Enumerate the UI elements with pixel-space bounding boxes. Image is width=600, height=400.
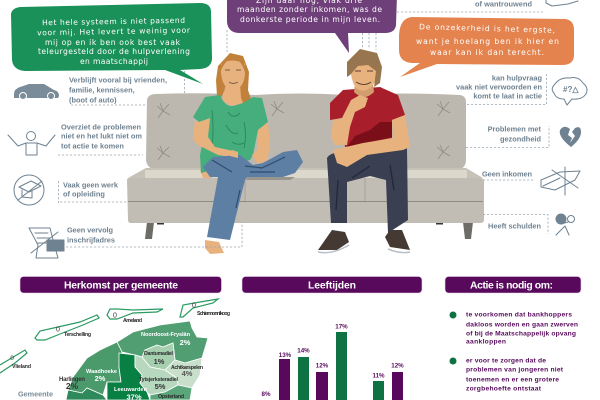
- bar chart: [262, 324, 404, 400]
- callout: schulden: [483, 214, 574, 235]
- callout: verblijf: (boot of auto): [69, 96, 117, 104]
- map labels: Schiermonnikoog: [197, 311, 230, 317]
- map labels: [10, 302, 230, 400]
- bullet 2: zorgbehoefte ontstaat: [466, 386, 542, 392]
- map labels: 2%: [180, 338, 191, 347]
- bar chart: 13%: [279, 352, 292, 359]
- map labels: 0: [113, 312, 117, 320]
- speech bubble: green: mij op en ik ben ook best vaak: [45, 38, 181, 47]
- icon: crossed graduation cap: [14, 175, 44, 205]
- map labels: 4%: [182, 369, 193, 378]
- speech bubble: orange: want je hoelang ben ik hier en: [416, 37, 559, 46]
- heading: [242, 276, 422, 293]
- man: [318, 49, 410, 253]
- speech bubble: green: voor mij. Het levert te weinig voor: [37, 26, 191, 37]
- callout: geen inschrijfadres: inschrijfadres: [67, 236, 115, 244]
- map labels: Waadhoeke: [86, 369, 117, 375]
- panel: actie is nodig: [445, 276, 581, 392]
- map labels: Noordoost-Fryslân: [141, 332, 191, 338]
- speech bubble: purple: donkerste periode in mijn leven.: [240, 15, 380, 24]
- speech bubble: orange: De onzekerheid is het ergste,: [419, 22, 555, 35]
- map labels: Dantumadiel: [144, 351, 174, 357]
- bullet 2: [450, 358, 564, 392]
- jeans: [327, 148, 408, 233]
- callout: geen werk: [14, 175, 128, 205]
- map labels: Terschelling: [64, 332, 91, 338]
- callout: gezondheid: gezondheid: [500, 134, 541, 144]
- speech bubble: orange: waar kan ik dan terecht.: [430, 48, 544, 57]
- callout: geen inkomen: Geen inkomen: [482, 170, 532, 178]
- icon: document with envelope: [29, 228, 64, 258]
- icon: sketch top right: [546, 0, 578, 6]
- speech bubble: green: Het hele systeem is niet passend: [42, 16, 185, 27]
- callout: geen inschrijfadres: [29, 222, 242, 258]
- heading: Actie is nodig om:: [470, 280, 553, 292]
- hair: [347, 49, 382, 87]
- face: [221, 60, 245, 90]
- neck: [222, 84, 243, 106]
- jeans: [203, 150, 303, 240]
- map labels: Ameland: [123, 318, 142, 324]
- bullet 2: problemen van jongeren niet: [466, 366, 564, 374]
- heading: [20, 276, 222, 293]
- bullet 1: of bij de Maatschappelijk opvang: [466, 330, 576, 338]
- callout: wantrouwend: [397, 0, 578, 12]
- callout: schulden: Heeft schulden: [488, 222, 541, 230]
- bar chart: 8%: [262, 391, 271, 398]
- icon: ball and chain figure: [556, 214, 574, 235]
- speech bubble: green: en maatschappij: [80, 57, 148, 66]
- callout: gezondheid: Problemen met: [488, 124, 542, 134]
- bar chart: 14%: [297, 348, 310, 354]
- panel: leeftijden: [242, 276, 422, 400]
- bar chart: 11%: [372, 372, 385, 380]
- shirt: [330, 87, 405, 147]
- icon: thought bubble: #?△: [563, 85, 579, 94]
- shirt: [193, 95, 268, 173]
- map labels: 1%: [154, 357, 165, 366]
- map labels: Leeuwarden: [114, 387, 148, 393]
- sofa: [127, 93, 484, 239]
- callout: overziet problemen: niet en het lukt niet om: [61, 132, 142, 140]
- icon: car: [14, 84, 59, 100]
- shoes: [318, 230, 349, 250]
- map: municipalities: [66, 321, 208, 400]
- neck: [354, 84, 374, 97]
- map: islands: [0, 299, 218, 373]
- speech bubble: green: teleurgesteld door de hulpverlening: [38, 47, 190, 56]
- speech bubble: green: [11, 3, 212, 84]
- panel: herkomst per gemeente: [0, 276, 230, 400]
- right arm: [252, 122, 270, 163]
- bar chart: 12%: [391, 362, 404, 370]
- map labels: 2%: [95, 374, 106, 383]
- map labels: Harlingen: [59, 377, 85, 383]
- callout: verblijf: familie, kennissen,: [69, 86, 135, 94]
- callout: hulpvraag: kan hulpvraag: [492, 74, 542, 82]
- bullet 1: te voorkomen dat bankhoppers: [466, 312, 572, 318]
- callout: hulpvraag: [456, 74, 587, 105]
- map labels: Opsterland: [158, 394, 184, 400]
- woman: [193, 53, 303, 254]
- foot: [205, 240, 224, 254]
- callout: geen werk: Vaak geen werk: [63, 180, 119, 190]
- map labels: 2%: [66, 381, 79, 391]
- foot under: [200, 170, 212, 178]
- bullet 2: toenemen en er een grotere: [466, 376, 559, 384]
- map labels: Vlieland: [12, 364, 31, 370]
- bullet 2: er voor te zorgen dat de: [466, 358, 546, 364]
- hands: [230, 150, 268, 164]
- callout: overziet problemen: Overziet de problemen: [61, 122, 141, 132]
- speech bubble: orange: [399, 17, 574, 77]
- heading: Herkomst per gemeente: [64, 280, 178, 292]
- callout: overziet problemen: tot actie te komen: [61, 142, 124, 150]
- legend title: Gemeente: [18, 390, 53, 398]
- bar chart: 17%: [335, 324, 348, 330]
- callout: geen inkomen: [482, 167, 580, 195]
- bullet 1: dakloos worden en gaan zwerven: [466, 322, 578, 328]
- icon: broken heart: [560, 127, 581, 147]
- map labels: 0: [192, 302, 196, 310]
- callout: overziet problemen: [8, 122, 143, 155]
- callout: gezondheid: [466, 124, 581, 148]
- right arm and hand: [333, 115, 410, 167]
- speech bubble: purple: [227, 0, 397, 53]
- map labels: Achtkarspelen: [171, 365, 203, 371]
- left arm: [193, 118, 238, 158]
- callout: verblijf: [14, 76, 167, 105]
- icon: crossed banknotes: [541, 167, 580, 195]
- callout: hulpvraag: vaak niet verwoorden en: [456, 82, 542, 92]
- arm to chin: [331, 95, 368, 145]
- callout: geen inschrijfadres: Geen vervolg: [67, 226, 113, 234]
- map labels: 0: [56, 326, 60, 334]
- callout: hulpvraag: komt te laat in actie: [473, 92, 542, 100]
- map labels: Tytsjerksteradiel: [139, 377, 179, 383]
- bar chart: 12%: [316, 362, 329, 370]
- map labels: 0: [10, 355, 14, 362]
- face: [350, 60, 378, 91]
- bullet 1: [450, 312, 578, 346]
- speech bubble: purple: maanden zonder inkomen, was de: [237, 5, 382, 14]
- icon: shrugging person: [8, 132, 55, 155]
- callout: geen werk: of opleiding: [63, 190, 105, 198]
- hair back: [216, 53, 258, 120]
- callout: verblijf: Verblijft vooral bij vrienden,: [69, 76, 167, 84]
- heading: Leeftijden: [308, 280, 356, 292]
- bullet 1: aankloppen: [466, 338, 506, 346]
- map labels: 5%: [155, 382, 166, 391]
